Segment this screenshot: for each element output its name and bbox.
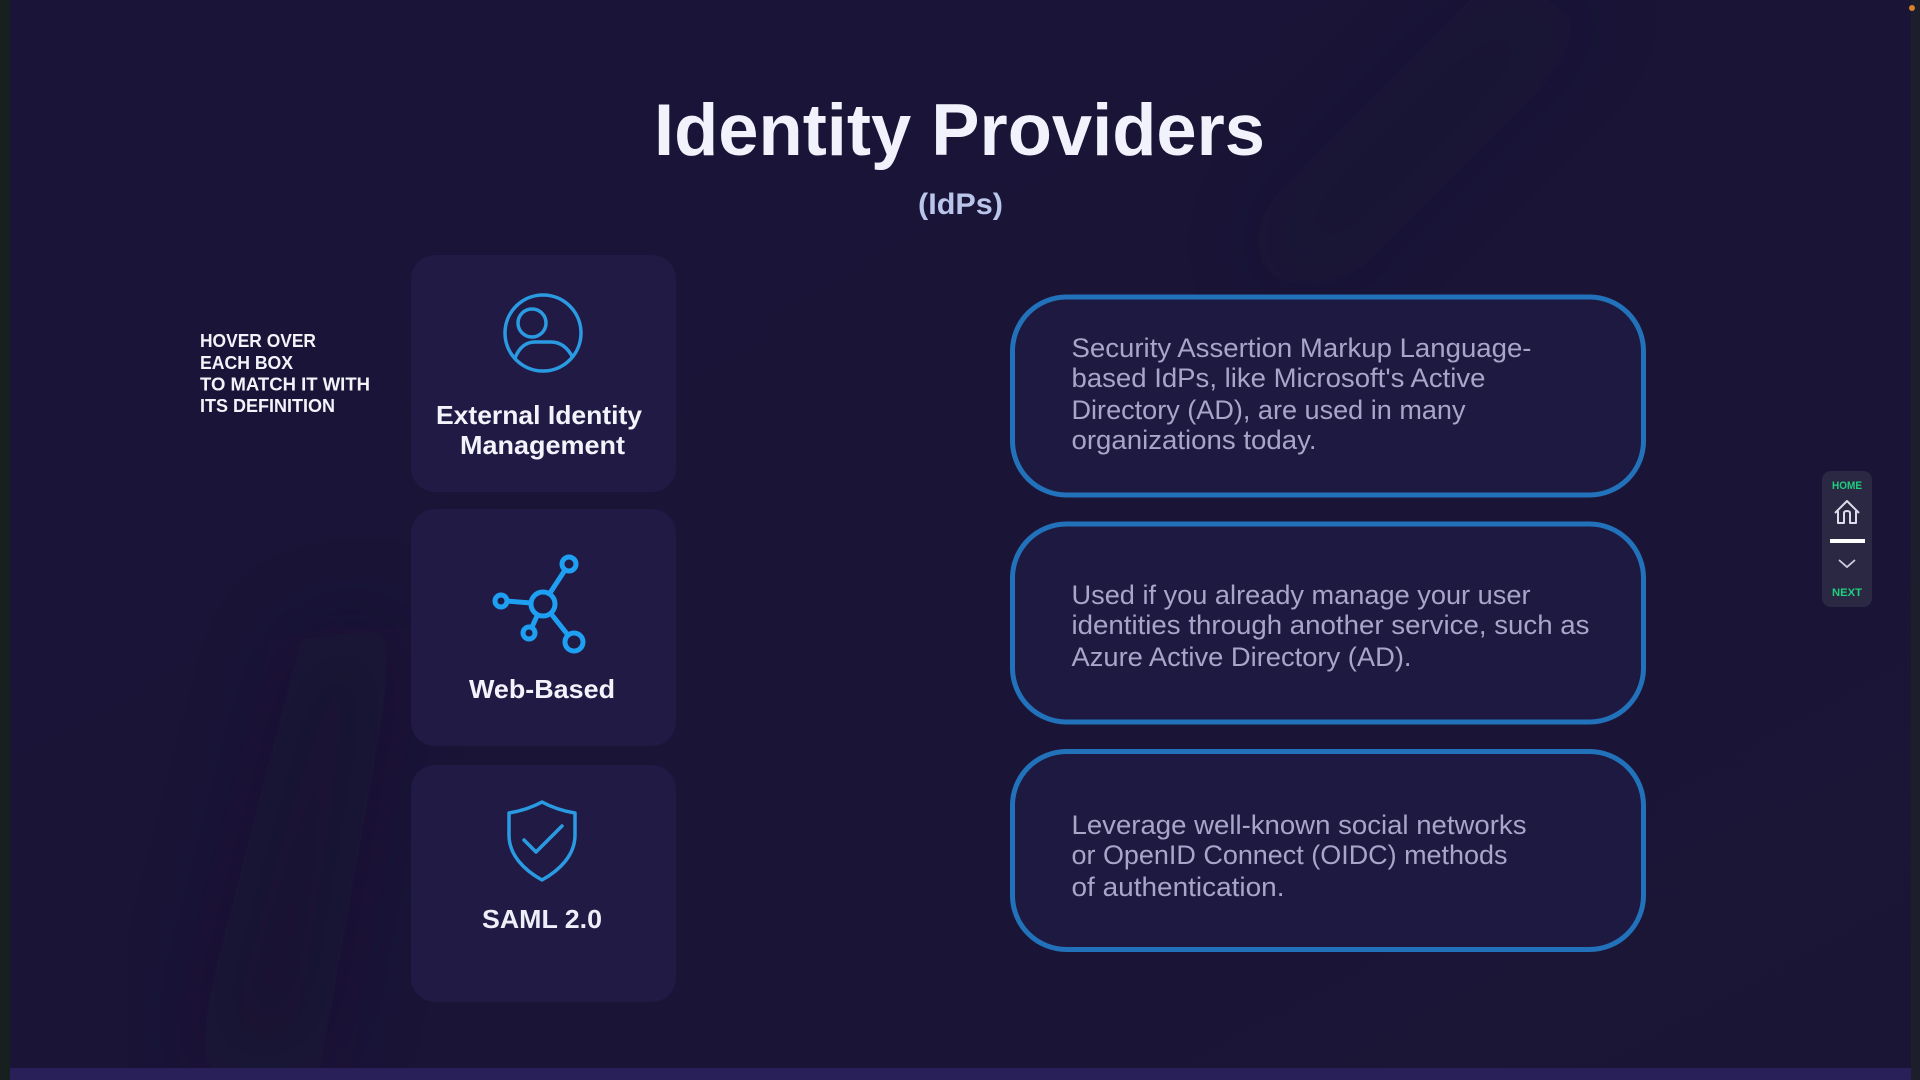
definition text: organizations today.	[1072, 425, 1316, 455]
definition text: based IdPs, like Microsoft's Active	[1072, 363, 1486, 393]
card label: SAML 2.0	[482, 904, 602, 934]
definition text	[1072, 333, 1532, 455]
definition text: or OpenID Connect (OIDC) methods	[1072, 840, 1508, 870]
instruction text: ITS DEFINITION	[200, 396, 335, 416]
instruction text: HOVER OVER	[200, 331, 316, 351]
divider bar	[1830, 539, 1865, 543]
instruction text: EACH BOX	[200, 353, 293, 373]
next label: NEXT	[1832, 587, 1862, 599]
card: Web-Based	[411, 509, 676, 746]
definition text: Used if you already manage your user	[1072, 580, 1531, 610]
title: Identity Providers	[654, 90, 1265, 171]
icon: shield check	[509, 802, 575, 880]
definition text: Directory (AD), are used in many	[1072, 395, 1466, 425]
navigation panel	[1822, 471, 1872, 607]
definition text: Security Assertion Markup Language-	[1072, 333, 1532, 363]
definition: SAML	[1012, 297, 1644, 495]
status dot	[1909, 5, 1915, 11]
card label: Web-Based	[469, 674, 615, 704]
definition text	[1072, 580, 1590, 672]
card label	[436, 400, 643, 460]
card label: Management	[460, 430, 625, 460]
icon: user	[505, 295, 581, 371]
definition: External Identity	[1012, 524, 1644, 722]
definition text: Leverage well-known social networks	[1072, 810, 1526, 840]
card: External Identity Management	[411, 255, 676, 492]
definition text: of authentication.	[1072, 872, 1284, 902]
card: SAML 2.0	[411, 765, 676, 1002]
home label: HOME	[1832, 480, 1862, 492]
instruction text	[200, 331, 370, 416]
instruction text: TO MATCH IT WITH	[200, 374, 370, 394]
icon: home	[1835, 501, 1859, 523]
icon: network	[495, 557, 583, 651]
card label: External Identity	[436, 400, 643, 430]
definition text: identities through another service, such as	[1072, 610, 1590, 640]
definition text	[1072, 810, 1526, 902]
bottom band	[10, 1068, 1911, 1080]
definition text: Azure Active Directory (AD).	[1072, 642, 1412, 672]
icon: chevron down	[1839, 560, 1855, 567]
subtitle: (IdPs)	[918, 188, 1003, 221]
definition: Web-Based	[1012, 752, 1644, 950]
